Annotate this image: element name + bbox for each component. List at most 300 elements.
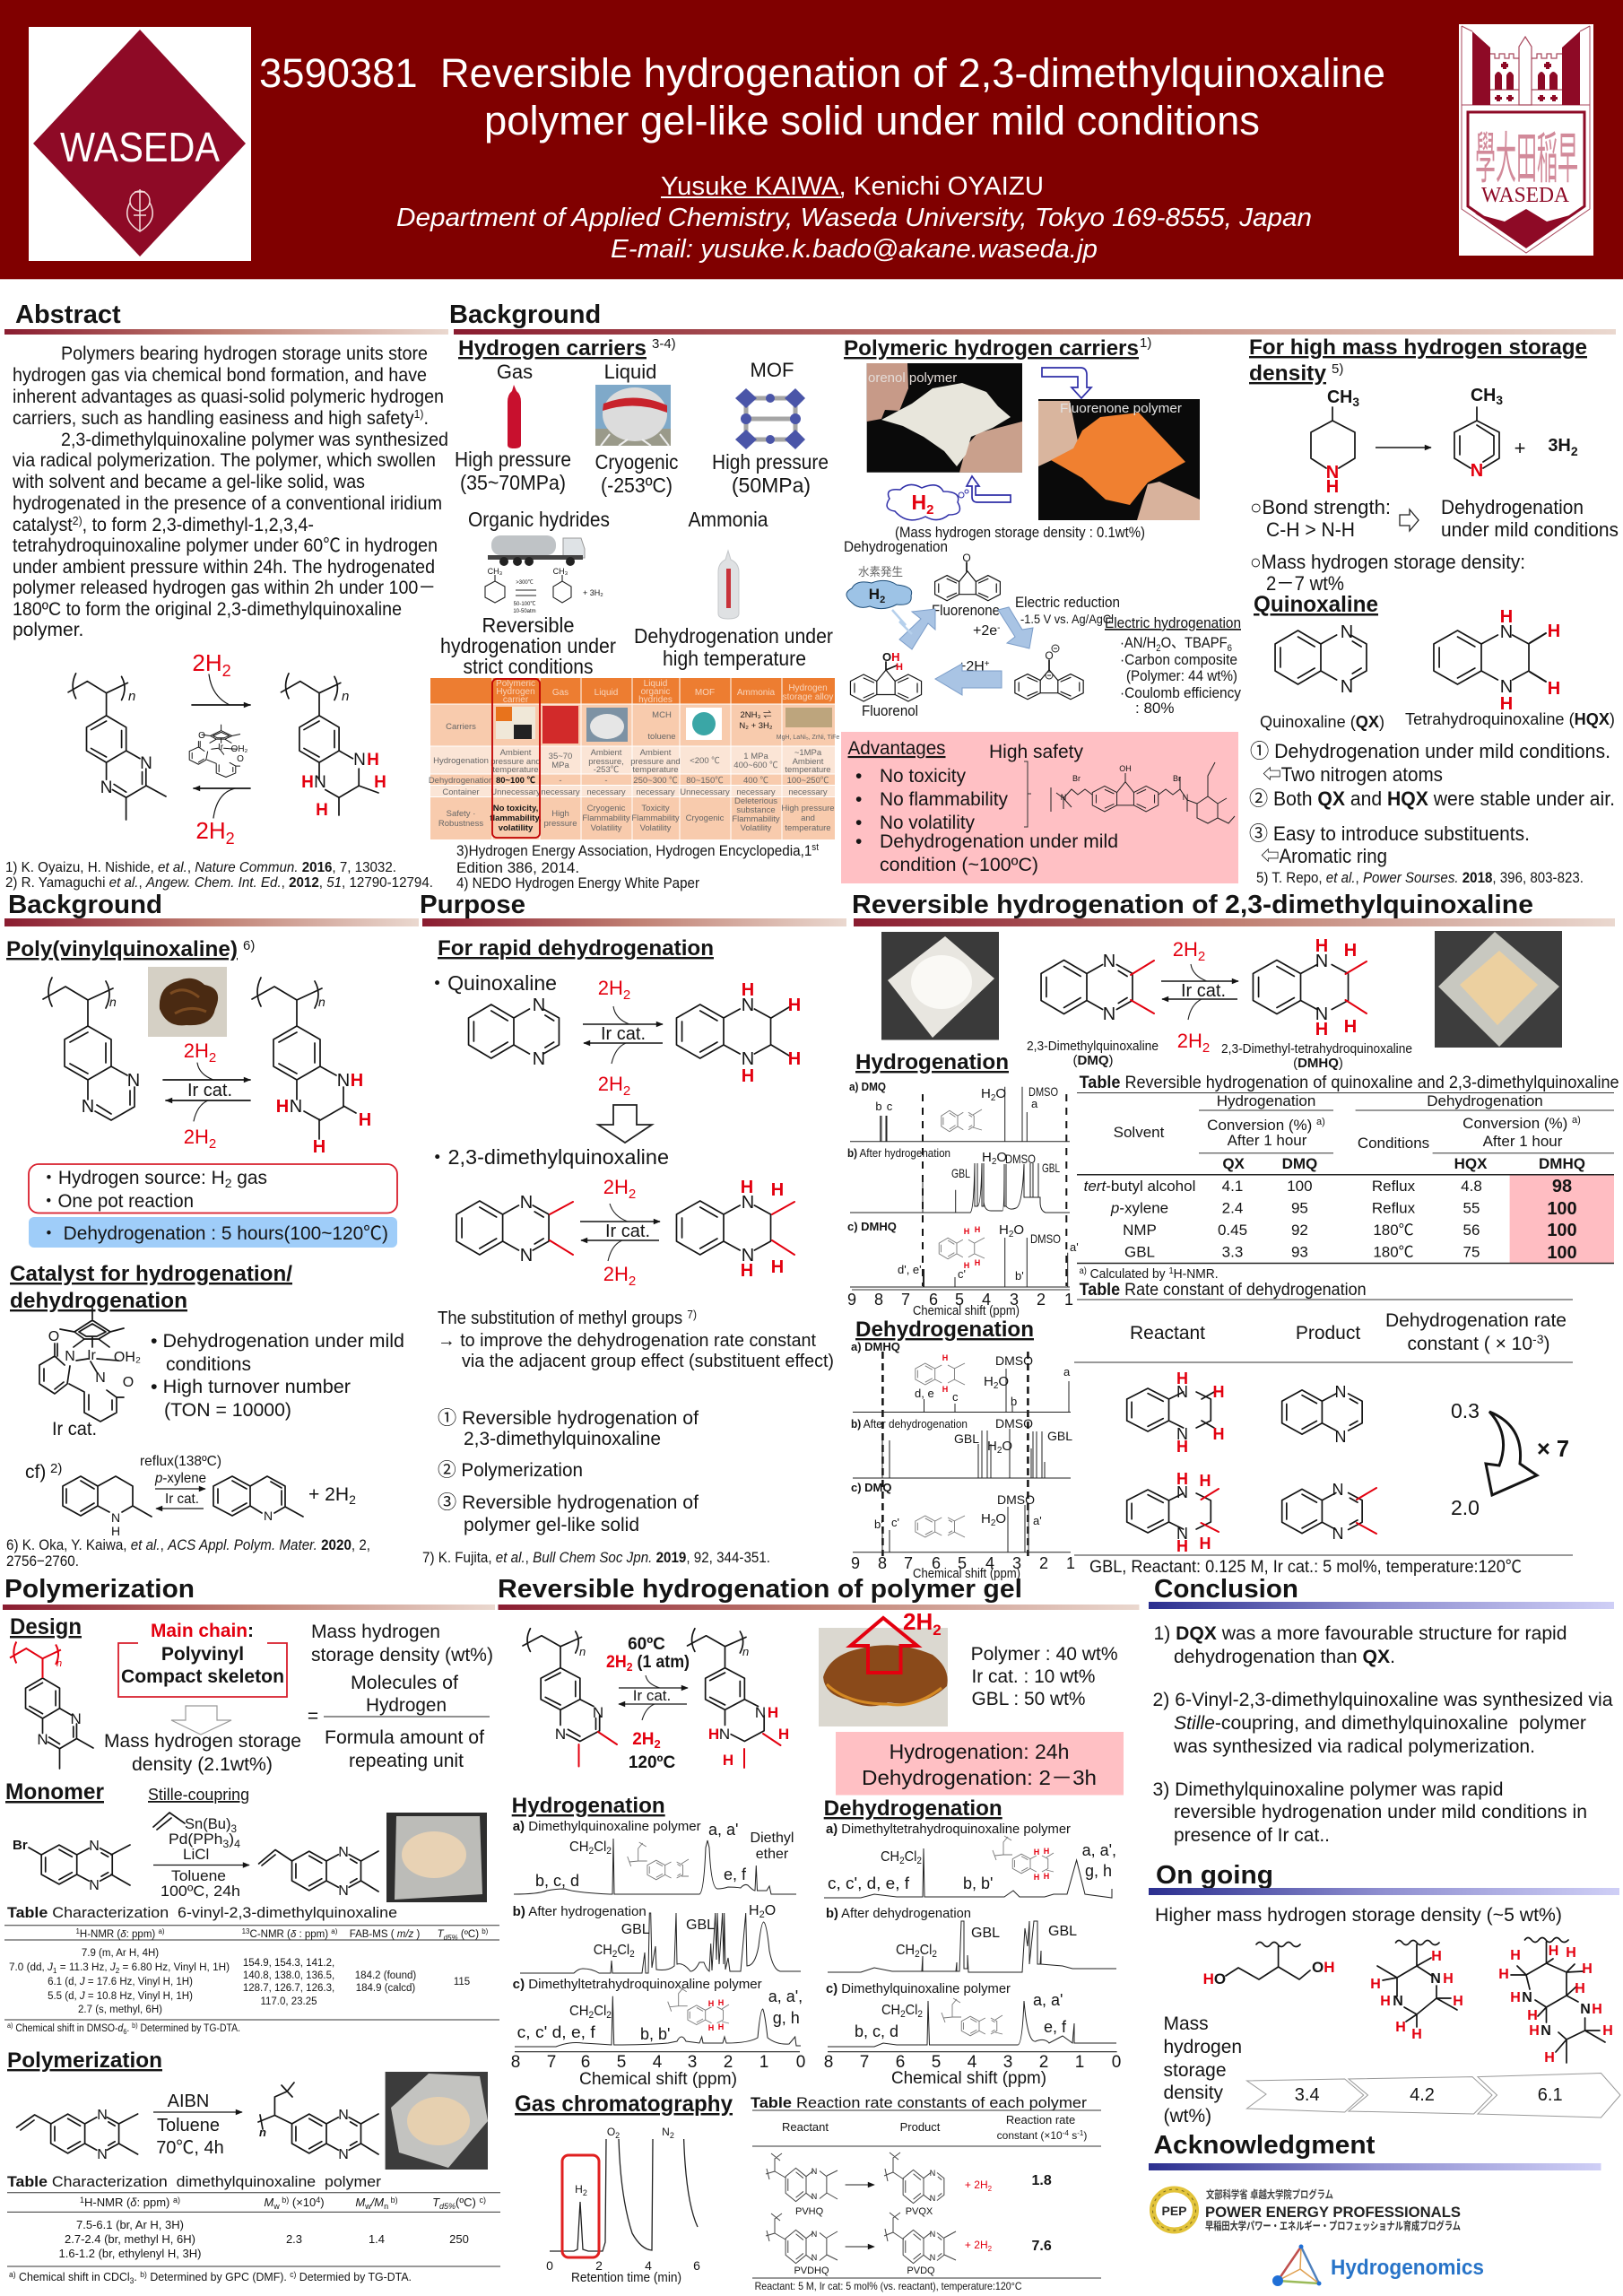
subheading: catalyst: dehydrogenation [10, 1289, 187, 1313]
scheme: polymer gel reaction: H [768, 1704, 778, 1721]
scheme: DMQ to DMHQ: 2 [1198, 949, 1205, 964]
subheading: for high mass density: density [1249, 361, 1327, 386]
chart: NMR dehydrogenation: 2 [991, 1518, 996, 1528]
chart: polymer NMR hydrogenation: c) Dimethyltetrahydroquinoxaline polymer [513, 1977, 762, 1992]
scheme: Stille coupling [13, 1786, 378, 1900]
table: monomer characterization: δ: ppm) [120, 1929, 155, 1940]
scheme: polymer hydrogenation: 2H [195, 817, 226, 844]
structures: QX and HQX: Tetrahydroquinoxaline (HQX) [1405, 710, 1615, 728]
callout: main chain: Main chain: [151, 1621, 254, 1641]
chart: polymer NMR hydrogenation: 2 [629, 1949, 635, 1960]
comparison table of hydrogen carriers: 400 ℃ [743, 776, 768, 786]
chart: NMR dehydrogenation: O [995, 1511, 1006, 1526]
panel: advantages: No flammability [880, 789, 1008, 810]
subheading: poly(vinylquinoxaline): 6) [243, 938, 255, 953]
key points: bond strength: under mild conditions [1441, 518, 1619, 541]
scheme: poly(vinylquinoxaline) hydrogenation: n [318, 995, 325, 1009]
table: reversible hydrogenation: 1 [1168, 1266, 1174, 1276]
scheme: polymer hydrogenation: n [128, 689, 135, 704]
fluorenone redox cycle: 2 [880, 595, 885, 605]
table: reversible hydrogenation: a) [1316, 1117, 1325, 1127]
chevron: 3.4 [1246, 2079, 1364, 2112]
electric hydrogenation list: Electric hydrogenation [1105, 614, 1241, 631]
structure: monomer unit: n [56, 1658, 62, 1669]
table: monomer characterization: 6 [123, 2028, 127, 2036]
gel composition [971, 1644, 1118, 1709]
scheme: 2,3-dimethylquinoxaline: 2 [629, 1187, 636, 1202]
comparison table of hydrogen carriers: 250~300 ℃ [633, 776, 678, 786]
table: reaction rate constants: s [1069, 2129, 1077, 2142]
comparison table of hydrogen carriers: 80~150℃ [686, 776, 724, 786]
chart: NMR dehydrogenation: DMSO [997, 1492, 1035, 1507]
table: reaction rate constants: 2 [988, 2245, 993, 2253]
chart: NMR hydrogenation: c' [958, 1267, 966, 1281]
table: monomer characterization: 7.9 (m, Ar H, 4H) [82, 1948, 159, 1959]
electric hydrogenation list: 6 [1228, 643, 1232, 654]
scheme: quinoxaline: H [742, 1066, 754, 1086]
chart: gas chromatogram [546, 2126, 700, 2285]
table: polymer characterization: (ºC) [456, 2196, 479, 2209]
carrier: liquid: (-253ºC) [601, 474, 673, 497]
chart: NMR dehydrogenation: O [998, 1374, 1009, 1389]
table: reaction rate constants: N [812, 2230, 817, 2239]
panel: advantages: No volatility [880, 813, 975, 833]
table: reversible hydrogenation: NMP [1123, 1222, 1157, 1239]
scheme: poly(vinylquinoxaline) hydrogenation: H [359, 1110, 371, 1130]
key points: quinoxaline features [1249, 740, 1615, 886]
table: monomer characterization: H-NMR ( [80, 1929, 120, 1940]
subheading: polymerization: Polymerization [7, 2048, 162, 2073]
photo: DMQ powder [881, 932, 999, 1040]
chart: polymer NMR dehydrogenation: GBL [971, 1926, 1000, 1941]
icon: hydrogen cloud: H [912, 491, 926, 514]
key points: bond strength: Dehydrogenation [1441, 496, 1584, 518]
chart: polymer NMR dehydrogenation: H [1034, 1848, 1039, 1857]
scheme: piperidine to pyridine: + [1515, 437, 1525, 459]
chart: NMR hydrogenation: DMSO [1030, 1231, 1061, 1246]
photo: polymer gel releasing hydrogen: 2H [903, 1608, 933, 1635]
structure: Ir catalyst: O [48, 1329, 59, 1344]
fluorenone redox cycle: Fluorenol [862, 702, 918, 719]
comparison table of hydrogen carriers: flammability, [490, 813, 542, 823]
subheading: dehydrogenation: Dehydrogenation [855, 1318, 1034, 1342]
structures: QX and HQX: H [1548, 679, 1560, 699]
callout: reaction times: Hydrogenation: 24h [890, 1740, 1069, 1763]
panel: advantages: • [855, 831, 862, 852]
chart: polymer NMR hydrogenation: 8 [511, 2053, 520, 2072]
structure: bicyclic polymer: N [1541, 2023, 1551, 2039]
carrier: MOF: High pressure [712, 450, 829, 474]
chart: polymer NMR hydrogenation: GBL [621, 1922, 650, 1937]
comparison table of hydrogen carriers: N₂ + 3H₂ [739, 721, 773, 731]
table: reversible hydrogenation: Hydrogenation [1217, 1092, 1315, 1109]
table: polymer characterization: w [364, 2202, 371, 2211]
table: rate constant of dehydrogenation: H [1176, 1370, 1188, 1387]
scheme: polymer gel reaction: H [778, 1726, 789, 1743]
panel: advantages: • [855, 813, 862, 833]
chart: gas chromatogram: 2 [595, 2258, 603, 2273]
chart: gas chromatogram: N [662, 2126, 670, 2138]
table: monomer characterization: . [126, 2023, 132, 2034]
structure: Ir catalyst: Ir cat. [52, 1419, 97, 1439]
abstract text: . [424, 408, 429, 429]
scheme: DMQ to DMHQ: 2H [1173, 938, 1198, 961]
table: reaction rate constants: PVQX [906, 2206, 933, 2217]
formula: mass hydrogen storage density: Hydrogen [366, 1695, 447, 1716]
chart: polymer NMR hydrogenation: CH [569, 1839, 590, 1855]
table: reaction rate constants: PVHQ [795, 2206, 824, 2217]
scheme: 2,3-dimethylquinoxaline: 2H [603, 1263, 629, 1285]
comparison table of hydrogen carriers: pressure [544, 819, 577, 829]
comparison table of hydrogen carriers: No toxicity, [493, 804, 538, 813]
comparison table of hydrogen carriers: pressure and [630, 757, 681, 767]
table: reaction rate constants: 1.8 [1031, 2173, 1052, 2188]
axis label: mass hydrogen storage density: (wt%) [1164, 2106, 1211, 2126]
arrow: reduction [967, 476, 1011, 502]
fluorenone redox cycle: Fluorenone [932, 602, 1000, 619]
comparison table of hydrogen carriers: High pressure [781, 804, 835, 813]
formula: mass hydrogen storage density: Mass hydrogen [311, 1622, 440, 1642]
chart: NMR dehydrogenation: GBL [1047, 1429, 1072, 1443]
table: reversible hydrogenation: HQX [1454, 1155, 1488, 1172]
abstract text: carriers, such as handling easiness and high safety [13, 408, 439, 429]
subheading: dehydrogenation: Dehydrogenation [824, 1796, 1002, 1821]
scheme: quinoline comparison: 2) [50, 1461, 62, 1476]
table: rate constant of dehydrogenation: H [1200, 1535, 1211, 1552]
table: monomer characterization: Chemical shift in DMSO- [13, 2023, 118, 2034]
formula: mass hydrogen storage density [308, 1622, 493, 1771]
comparison table of hydrogen carriers: necessary [636, 787, 675, 797]
scheme: DMQ to DMHQ: N [1103, 1004, 1115, 1024]
scheme: polymer gel reaction: 2H [632, 1730, 655, 1749]
structure: bicyclic polymer: H [1549, 1944, 1558, 1959]
scheme: polymer hydrogenation: H [367, 751, 379, 770]
scheme: polymer gel reaction: H [723, 1752, 733, 1769]
table: rate constant of dehydrogenation: N [1332, 1525, 1343, 1543]
formula: mass hydrogen storage density: storage density (wt%) [311, 1645, 493, 1665]
subheading: quinoxaline: Quinoxaline [1254, 592, 1378, 617]
electric hydrogenation list: ·Coulomb efficiency [1120, 684, 1241, 701]
scheme: 2,3-dimethylquinoxaline: N [742, 1193, 754, 1213]
logo: Waseda crest [1459, 24, 1593, 256]
table: monomer characterization: 117.0, 23.25 [260, 1996, 317, 2007]
scheme: radical polymerization: N [338, 2147, 349, 2162]
carrier: organic hydrides: Organic hydrides [468, 508, 610, 531]
abstract text: 1) [414, 407, 424, 421]
chart: polymer NMR hydrogenation: e, f [724, 1866, 747, 1883]
table: monomer characterization: Table Characterization 6-vinyl-2,3-dimethylquinoxaline [7, 1904, 397, 1921]
table: polymer characterization: n [384, 2202, 388, 2211]
comparison table of hydrogen carriers: necessary [736, 787, 776, 797]
callout: main chain: Polyvinyl [161, 1644, 244, 1665]
chart: polymer NMR dehydrogenation: Cl [920, 1943, 932, 1958]
chart: NMR hydrogenation: a) DMQ [849, 1080, 886, 1093]
table: rate constant of dehydrogenation: H [1212, 1425, 1225, 1443]
chart: polymer NMR dehydrogenation: Cl [905, 1849, 916, 1865]
table: reaction rate constants: N [930, 2194, 935, 2203]
comparison table of hydrogen carriers: Flammability [582, 813, 630, 823]
scheme: polymer hydrogenation: H [374, 773, 386, 792]
gel composition: Polymer : 40 wt% [971, 1644, 1118, 1665]
structure: bicyclic polymer: H [1566, 1945, 1576, 1961]
table: reaction rate constants: Table Reaction rate constants of each polymer [751, 2094, 1087, 2111]
table: polymer characterization: Determined by GPC (DMF). [147, 2270, 290, 2283]
callout: dehydrogenation time: ・ Dehydrogenation : 5 hours(100~120℃) [39, 1223, 388, 1244]
structures: QX and HQX: H [1500, 694, 1513, 714]
table: polymer characterization: Determied by TG-DTA. [296, 2270, 412, 2283]
chart: polymer NMR hydrogenation: Cl [617, 1943, 629, 1958]
scheme: polymer hydrogenation: O [198, 731, 205, 741]
chart: polymer NMR dehydrogenation: e, f [1044, 2018, 1067, 2036]
chart: NMR hydrogenation: 5 [955, 1291, 964, 1309]
chart: NMR hydrogenation: Chemical shift (ppm) [913, 1303, 1020, 1318]
table: monomer characterization: 1 [53, 1967, 57, 1975]
scheme: radical polymerization [17, 2083, 378, 2162]
table: monomer characterization: d [118, 2023, 124, 2034]
heading: Acknowledgment [1153, 2131, 1376, 2160]
table: reaction rate constants: -4 [1063, 2129, 1069, 2137]
arrow: oxidation [1042, 368, 1091, 398]
chart: NMR dehydrogenation: GBL [954, 1431, 979, 1446]
photo: polymer gel releasing hydrogen: 2 [933, 1622, 942, 1639]
chart: gas chromatogram: 2 [670, 2131, 674, 2140]
references [5, 860, 433, 891]
scheme: poly(vinylquinoxaline) hydrogenation: 2H [184, 1039, 209, 1062]
carrier: ammonia [634, 508, 833, 670]
structure: bicyclic polymer: H [1602, 2023, 1613, 2039]
axis label: mass hydrogen storage density: hydrogen [1164, 2037, 1242, 2057]
scheme: poly(vinylquinoxaline) hydrogenation: n [109, 995, 117, 1009]
chart: NMR dehydrogenation: O [1002, 1439, 1012, 1454]
scheme: DMQ to DMHQ: N [1103, 952, 1115, 971]
chart: polymer NMR dehydrogenation: b, c, d [855, 2022, 898, 2040]
scheme: quinoxaline: H [788, 1049, 801, 1069]
table: reversible hydrogenation: 100 [1547, 1243, 1577, 1263]
chart: NMR dehydrogenation: 6 [932, 1554, 941, 1572]
table: monomer characterization: 2 [116, 1967, 120, 1975]
chart: polymer NMR hydrogenation: g, h [773, 2009, 800, 2027]
comparison table of hydrogen carriers: Liquid [595, 688, 618, 698]
chart: NMR dehydrogenation: d, e [915, 1387, 934, 1400]
table: reversible hydrogenation: Solvent [1114, 1124, 1165, 1141]
electric hydrogenation list: : 80% [1135, 700, 1174, 717]
chart: NMR dehydrogenation [851, 1340, 1075, 1581]
panel: conclusion [1149, 1575, 1614, 1846]
scheme: polymer gel reaction [523, 1629, 789, 1772]
callout: hydrogen source: gas [231, 1168, 267, 1188]
arrow: open down [598, 1105, 652, 1143]
table: reversible hydrogenation: 180℃ [1373, 1244, 1414, 1261]
chart: polymer NMR hydrogenation: 7 [547, 2053, 556, 2072]
comparison table of hydrogen carriers: Ambient [793, 757, 824, 767]
comparison table of hydrogen carriers: Liquid [644, 679, 667, 689]
structure: bicyclic polymer: H [1582, 1961, 1593, 1977]
comparison table of hydrogen carriers: hydrides [638, 695, 673, 705]
chart: polymer NMR dehydrogenation: 2 [1039, 2053, 1048, 2072]
scheme: Stille coupling: Br [13, 1838, 28, 1853]
table: reaction rate constants: 7.6 [1031, 2239, 1052, 2254]
chart: NMR dehydrogenation: DMSO [995, 1416, 1033, 1431]
abstract text: hydrogenated in the presence of a conventional iridium [13, 493, 442, 514]
fluorenone redox cycle: OH [882, 650, 900, 664]
table: polymer characterization: M [264, 2196, 273, 2209]
fluorenone redox cycle: H [869, 586, 880, 603]
callout: hydrogen source [29, 1164, 397, 1213]
chart: polymer NMR hydrogenation: a, a' [708, 1821, 738, 1839]
table: reaction rate constants: 2 [988, 2185, 993, 2193]
text: methyl substitution effect: The substitution of methyl groups [438, 1309, 702, 1328]
chart: polymer NMR dehydrogenation: g, h [1085, 1862, 1112, 1880]
table: reaction rate constants: + 2H [965, 2179, 988, 2191]
chart: NMR hydrogenation: H [964, 1227, 969, 1236]
structure: bicyclic polymer: H [1510, 1990, 1521, 2005]
key points: bond strength: ○Bond strength: [1250, 496, 1391, 518]
abstract text [12, 344, 448, 640]
chart: polymer NMR dehydrogenation: H [1034, 1873, 1039, 1882]
scheme: quinoline comparison [25, 1454, 356, 1538]
photo: fluorenol polymer: orenol polymer [868, 370, 957, 386]
authors: Yusuke KAIWA, Kenichi OYAIZU [661, 172, 1044, 201]
table: reversible hydrogenation: 4.1 [1222, 1178, 1243, 1195]
table: polymer characterization: b) [280, 2196, 289, 2205]
catalyst properties: • Dehydrogenation under mild [151, 1331, 404, 1352]
chart: polymer NMR dehydrogenation: Chemical shift (ppm) [891, 2069, 1046, 2088]
chart: NMR hydrogenation: H [999, 1222, 1009, 1238]
scheme: DMQ to DMHQ: 2,3-Dimethylquinoxaline [1027, 1039, 1159, 1054]
table: monomer characterization: b) [132, 2022, 138, 2030]
structure: Ir catalyst: OH₂ [114, 1350, 141, 1365]
panel: advantages: Br [1072, 774, 1081, 783]
table: reaction rate constants: Reactant [782, 2120, 829, 2134]
fluorenone redox cycle: - [997, 623, 1000, 633]
scheme: quinoline comparison: p-xylene [154, 1471, 206, 1486]
chart: polymer NMR hydrogenation: a) Dimethylquinoxaline polymer [513, 1819, 701, 1834]
heading [1149, 1575, 1614, 1609]
subheading: hydrogen carriers: 3-4) [652, 336, 676, 352]
chart: NMR dehydrogenation: H [942, 1353, 948, 1362]
table: polymer characterization: Table Characterization dimethylquinoxaline polymer [7, 2173, 381, 2190]
structures: QX and HQX: Quinoxaline (QX) [1260, 713, 1384, 731]
subheading: monomer: Monomer [5, 1779, 104, 1805]
callout: hydrogen source: ・Hydrogen source: H [39, 1168, 226, 1188]
scheme: polymer gel reaction: n [742, 1645, 749, 1658]
scheme: quinoxaline: N [742, 1049, 754, 1069]
key points: quinoxaline features: ③ Easy to introduce substituents. [1249, 822, 1530, 845]
goals list [438, 1408, 699, 1535]
references 3 and 4: 4) NEDO Hydrogen Energy White Paper [456, 874, 699, 891]
table: monomer characterization: 2.7 (s, methyl, 6H) [78, 2005, 162, 2015]
goals list: ③ Reversible hydrogenation of [438, 1492, 699, 1513]
scheme: DMQ to DMHQ: H [1315, 936, 1328, 956]
chart: NMR dehydrogenation: H [981, 1511, 991, 1526]
callout: main chain [118, 1621, 287, 1697]
table: reaction rate constants: N [812, 2253, 817, 2262]
table: polymer characterization: T [432, 2196, 440, 2209]
chart: NMR dehydrogenation: b [1011, 1395, 1017, 1408]
abstract text: catalyst [13, 515, 76, 535]
scheme: quinoline comparison: N [111, 1510, 120, 1525]
chart: NMR dehydrogenation: 1 [1066, 1554, 1075, 1572]
carrier: organic hydrides [440, 508, 616, 678]
table: rate constant of dehydrogenation: 0.3 [1451, 1399, 1480, 1422]
chart: NMR dehydrogenation: 3 [1012, 1554, 1021, 1572]
chart: NMR dehydrogenation: 5 [958, 1554, 967, 1572]
table: rate constant of dehydrogenation: -3 [1532, 1332, 1544, 1346]
chart: polymer NMR hydrogenation: b, b' [640, 2025, 670, 2043]
scheme: polymer gel reaction: N [593, 1704, 603, 1721]
conclusion text: dehydrogenation than QX. [1174, 1647, 1395, 1667]
scheme: DMQ to DMHQ: H [1344, 1017, 1357, 1037]
table: monomer characterization: 184.9 (calcd) [356, 1983, 415, 1994]
scheme: poly(vinylquinoxaline) hydrogenation: N [290, 1097, 302, 1117]
structure: bicyclic polymer: H [1529, 2023, 1540, 2039]
fluorenone redox cycle: + [985, 659, 990, 669]
structures: QX and HQX: H [1548, 622, 1560, 641]
chart: polymer NMR dehydrogenation: b, b' [963, 1874, 993, 1892]
scheme: quinoxaline [427, 971, 801, 1099]
heading [1149, 1861, 1619, 1895]
chart: polymer NMR dehydrogenation: 2 [915, 1949, 920, 1960]
comparison table of hydrogen carriers: Robustness [438, 819, 483, 829]
comparison table of hydrogen carriers: pressure and [490, 757, 541, 767]
comparison table of hydrogen carriers: temperature [785, 765, 831, 775]
table: rate constant of dehydrogenation: H [1176, 1470, 1188, 1488]
panel: advantages: N [1183, 793, 1188, 802]
scheme: poly(vinylquinoxaline) hydrogenation: 2 [209, 1136, 216, 1152]
chevron: 4.2: 4.2 [1410, 2085, 1435, 2105]
electric hydrogenation list: (Polymer: 44 wt%) [1126, 667, 1237, 684]
carrier: organic hydrides: hydrogenation under [440, 634, 616, 657]
key points: quinoxaline features: 5) T. Repo, et al., Power Sourses. 2018, 396, 803-823. [1256, 869, 1584, 886]
scheme: DMQ to DMHQ: H [1315, 1020, 1328, 1039]
scheme: quinoxaline: N [742, 996, 754, 1015]
scheme: polymer hydrogenation: H [316, 801, 328, 820]
table: monomer characterization: 140.8, 138.0, 136.5, [243, 1970, 334, 1981]
chevron: 6.1 [1478, 2074, 1620, 2118]
table: rate constant of dehydrogenation: N [1176, 1425, 1188, 1443]
panel: advantages: No toxicity [880, 766, 966, 787]
comparison table of hydrogen carriers: 35~70 [549, 752, 572, 761]
chart: polymer NMR dehydrogenation: Cl [906, 2003, 917, 2018]
comparison table of hydrogen carriers: -253℃ [594, 765, 620, 775]
table: monomer characterization: d5% [444, 1934, 458, 1942]
structure: monomer unit: N [70, 1710, 82, 1727]
chart: NMR dehydrogenation: a) DMHQ [851, 1340, 900, 1353]
chart: polymer NMR dehydrogenation: GBL [1048, 1924, 1077, 1939]
goals list: polymer gel-like solid [464, 1515, 639, 1535]
chart: polymer NMR dehydrogenation: CH [881, 2003, 902, 2018]
scheme: 2,3-dimethylquinoxaline: H [741, 1261, 753, 1281]
table: polymer characterization: 2.7-2.4 (br, methyl H, 6H) [65, 2232, 195, 2246]
abstract text: Polymers bearing hydrogen storage units store [61, 344, 428, 364]
structure: monomer unit [10, 1641, 93, 1769]
scheme: piperidine to pyridine: 3 [1496, 393, 1503, 407]
carrier: organic hydrides: Reversible [482, 613, 574, 637]
structure: diol polymer: HO [1203, 1970, 1226, 1987]
chart: polymer NMR hydrogenation: 4 [653, 2053, 663, 2072]
table: rate constant of dehydrogenation: N [1334, 1383, 1347, 1401]
panel: advantages: • [855, 789, 862, 810]
text: methyl substitution effect: 7) [687, 1308, 697, 1321]
table: rate constant of dehydrogenation: Dehydrogenation rate [1385, 1310, 1567, 1331]
subheading: hydrogenation: Hydrogenation [855, 1050, 1009, 1074]
chart: NMR hydrogenation: 6 [929, 1291, 938, 1309]
table: monomer characterization: 154.9, 154.3, 141.2, [243, 1958, 334, 1969]
gel composition: Ir cat. : 10 wt% [972, 1666, 1096, 1687]
table: reversible hydrogenation: After 1 hour [1483, 1133, 1563, 1150]
abstract text: inherent advantages as quasi-solid polymeric hydrogen [13, 387, 444, 407]
scheme: polymer hydrogenation: n [342, 689, 349, 704]
